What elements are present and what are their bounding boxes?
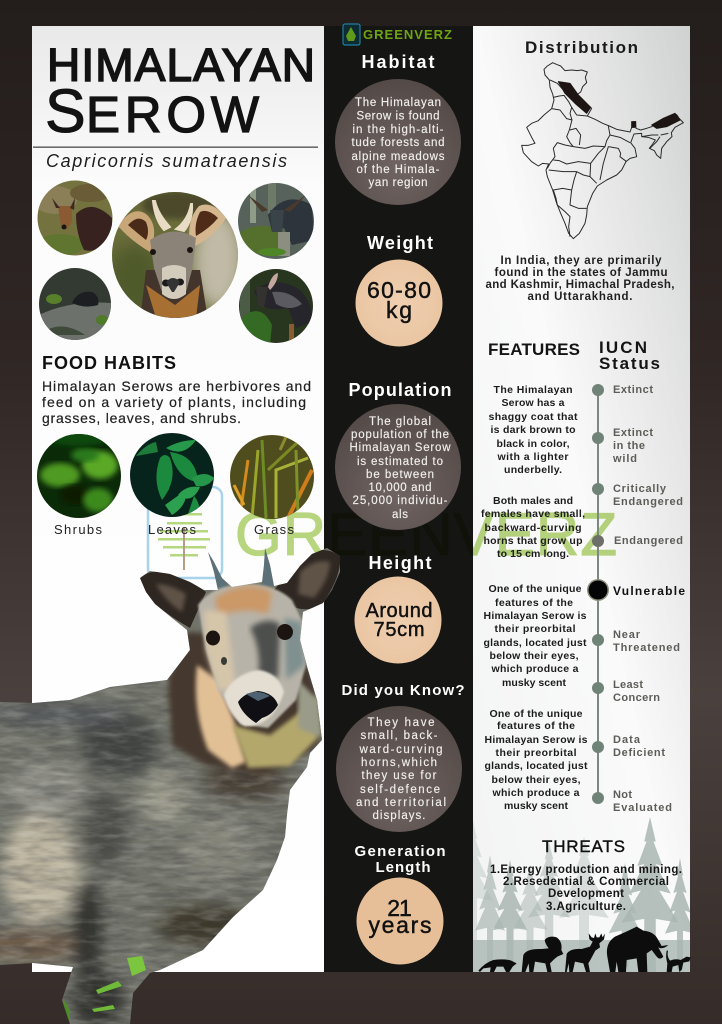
circle: generation length value: years [368,912,432,938]
icon: deer [565,933,605,972]
circle: did you know text: displays. [372,810,426,822]
heading: IUCN status: Status [599,354,660,373]
circle: height value [354,576,442,664]
circle: weight value: 60-80 [367,277,431,303]
text: feature coat: underbelly. [504,464,562,476]
circle: did you know text: horns,which [361,757,437,769]
nose [238,691,278,723]
green fringe on foreleg [127,956,146,976]
text: feature glands: One of the unique [488,583,582,595]
chart: IUCN status timeline: wild [612,453,637,465]
text: feature glands repeated: musky scent [504,800,568,812]
heading: IUCN status: IUCN [599,338,647,357]
circle: did you know text [336,706,462,832]
circle: population text: be between [366,469,434,481]
text: feature glands repeated [484,708,588,812]
text: feature glands repeated: Himalayan Serow is [484,734,588,746]
chart: IUCN status timeline: Deficient [613,747,665,759]
circle: did you know text: self-defence [360,784,440,796]
text: feature glands: Himalayan Serow is [484,610,587,622]
text: feature coat: is dark brown to [490,424,576,436]
text: feature glands repeated: glands, located just [484,760,588,772]
illustration: forest silhouette behind threats [473,817,690,972]
circle: habitat text: alpine meadows [352,151,445,163]
circle: habitat text [335,79,461,205]
coat shading [0,704,287,1024]
logo: GreenVerz header: GREENVERZ [363,27,452,42]
text: feature coat: with a lighter [496,451,568,463]
text: feature horns: horns that grow up [484,535,582,547]
chart: IUCN status timeline: Extinct [613,384,653,396]
text: feature horns: to 15 cm long. [497,548,569,560]
text: feature glands repeated: which produce a [492,787,580,799]
icon: leopard [478,959,517,972]
chart: IUCN status timeline: Data [613,734,641,746]
circle: population text: Himalayan Serow [350,442,451,454]
heading: population: Population [348,380,452,400]
text: threats list: 2.Resedential & Commercial [503,876,669,888]
text: feature glands: below their eyes, [490,650,579,662]
circle: did you know text: small, back- [360,730,438,742]
circle: habitat text: yan region [368,177,428,189]
title: HIMALAYAN [47,39,315,91]
heading: food habits: FOOD HABITS [42,353,176,373]
eyes [206,630,220,646]
circle: did you know text: ward-curving [358,744,442,756]
chart: IUCN status timeline: Least [613,679,643,691]
circle: weight value [356,260,442,346]
head [198,584,306,728]
heading: generation length: Generation [354,843,446,860]
circle: population text: 25,000 individu- [352,495,448,507]
chart: IUCN status timeline: Endangered [614,535,683,547]
text: distribution description: In India, they are primarily [500,255,662,267]
panel: right light column [473,26,690,972]
photo: grass [230,435,314,519]
text: feature glands: glands, located just [484,637,587,649]
text: feature glands repeated: One of the unique [490,708,583,720]
circle: did you know text: They have [368,717,434,729]
text: threats list [490,864,682,913]
photo: serow among ferns [239,269,313,345]
text: feature glands: their preorbital [494,623,576,635]
heading: IUCN status [599,338,660,373]
heading: did you know: Did you Know? [342,682,464,699]
text: feature horns: Both males and [493,495,573,507]
text: feature glands repeated: features of the [497,720,575,732]
photo: serow on rocky slope [39,268,111,340]
heading: generation length: Length [376,859,430,876]
chart: IUCN status timeline: in the [613,440,645,452]
text: food habits description: feed on a variety of plants, including [42,394,306,410]
circle: weight value: kg [386,297,412,323]
chart: IUCN status timeline: Near [613,629,641,641]
circle: height value: 75cm [374,619,424,641]
title [45,39,315,145]
circle: population text: is estimated to [357,456,443,468]
chart: IUCN status timeline: Vulnerable [613,584,685,598]
circle: generation length value [356,878,444,964]
text: feature coat: shaggy coat that [488,411,578,423]
text: distribution description: and Kashmir, Himachal Pradesh, [486,279,674,291]
circle: habitat text: tude forests and [352,137,444,149]
text: feature horns: females have small, [481,508,585,520]
icon: elephant [607,927,668,972]
text: feature coat: Serow has a [502,397,565,409]
text: distribution description [486,255,674,303]
text: feature horns: backward-curving [484,522,582,534]
text: feature horns [481,495,585,560]
text: food habits description: grasses, leaves, and shrubs. [42,410,241,426]
title: S [45,77,86,145]
circle: habitat text: of the Himala- [356,164,440,176]
text: feature glands repeated: their preorbital [496,747,577,759]
chart: IUCN status timeline [587,384,685,814]
icon: monkey [666,951,691,972]
labels: food types: Leaves [148,522,196,537]
text: distribution description: found in the states of Jammu [494,267,668,279]
panel: left white column [32,26,324,972]
horns [153,201,192,231]
text: feature coat: black in color, [496,438,570,450]
photo: leaves [130,433,214,517]
heading: distribution: Distribution [525,38,638,57]
labels: food types: Shrubs [54,522,102,537]
circle: habitat text: in the high-alti- [352,124,444,136]
chart: IUCN status timeline: Endangered [613,496,683,508]
icon: ibex [522,937,563,972]
text: feature glands: features of the [495,597,573,609]
text: feature glands [484,583,587,689]
heading: weight: Weight [367,233,433,253]
text: distribution description: and Uttarakhand. [528,291,632,303]
neck [140,270,208,320]
neck and mane [168,632,322,775]
circle: population text: 10,000 and [368,482,432,494]
heading: threats: THREATS [542,837,625,856]
heading: habitat: Habitat [362,52,434,72]
text: threats list: Development [548,888,624,900]
text: threats list: 1.Energy production and mining. [490,864,682,876]
chart: IUCN status timeline: Not [613,789,632,801]
labels: food types: Grass [254,522,294,537]
logo: GreenVerz header [343,24,452,45]
circle: did you know text: and territorial [356,797,446,809]
map: India distribution [522,63,683,239]
logo: faint GreenVerz icon watermark [148,487,222,578]
circle: habitat text: The Himalayan [355,97,441,109]
photo: serow portrait [112,192,238,318]
text: feature glands repeated: below their eyes, [492,774,581,786]
circle: population text [335,404,461,530]
circle: height value: Around [366,600,432,622]
panel: center dark column [324,26,473,972]
fur texture [0,640,345,1024]
chart: IUCN status timeline: Threatened [613,642,680,654]
ears [140,572,206,628]
circle: did you know text: they use for [362,770,437,782]
chart: IUCN status timeline: Concern [613,692,660,704]
photo: serow on hillside [33,180,113,256]
photo: shrubs [37,430,121,518]
watermark: GREENVERZ: GREENVERZ [235,501,617,568]
horns [208,548,274,592]
text: threats list: 3.Agriculture. [546,901,626,913]
head [150,231,196,298]
illustration: serow foreground [0,540,345,1024]
chart: IUCN status timeline: Critically [613,483,667,495]
text: feature glands: musky scent [502,677,566,689]
chart: IUCN status timeline: Extinct [613,427,653,439]
title: EROW [86,86,259,143]
heading: features: FEATURES [488,340,580,359]
chart: IUCN status timeline: Evaluated [613,802,672,814]
circle: population text: population of the [351,429,449,441]
text: feature coat: The Himalayan [494,384,572,396]
text: feature glands: which produce a [490,663,579,675]
heading: height: Height [368,553,432,573]
subtitle: scientific name: Capricornis sumatraensis [46,151,287,171]
circle: generation length value: 21 [387,895,411,921]
circle: population text: als [392,509,408,521]
photo: serow in mossy forest [236,183,314,259]
circle: habitat text: Serow is found [356,110,440,122]
heading: generation length [354,843,446,876]
illustration: animal silhouettes [478,927,691,972]
ears [118,211,154,252]
text: food habits description [42,378,311,426]
text: food habits description: Himalayan Serows are herbivores and [42,378,311,394]
labels: food types [54,522,294,537]
circle: population text: The global [369,416,431,428]
text: feature coat [488,384,578,476]
